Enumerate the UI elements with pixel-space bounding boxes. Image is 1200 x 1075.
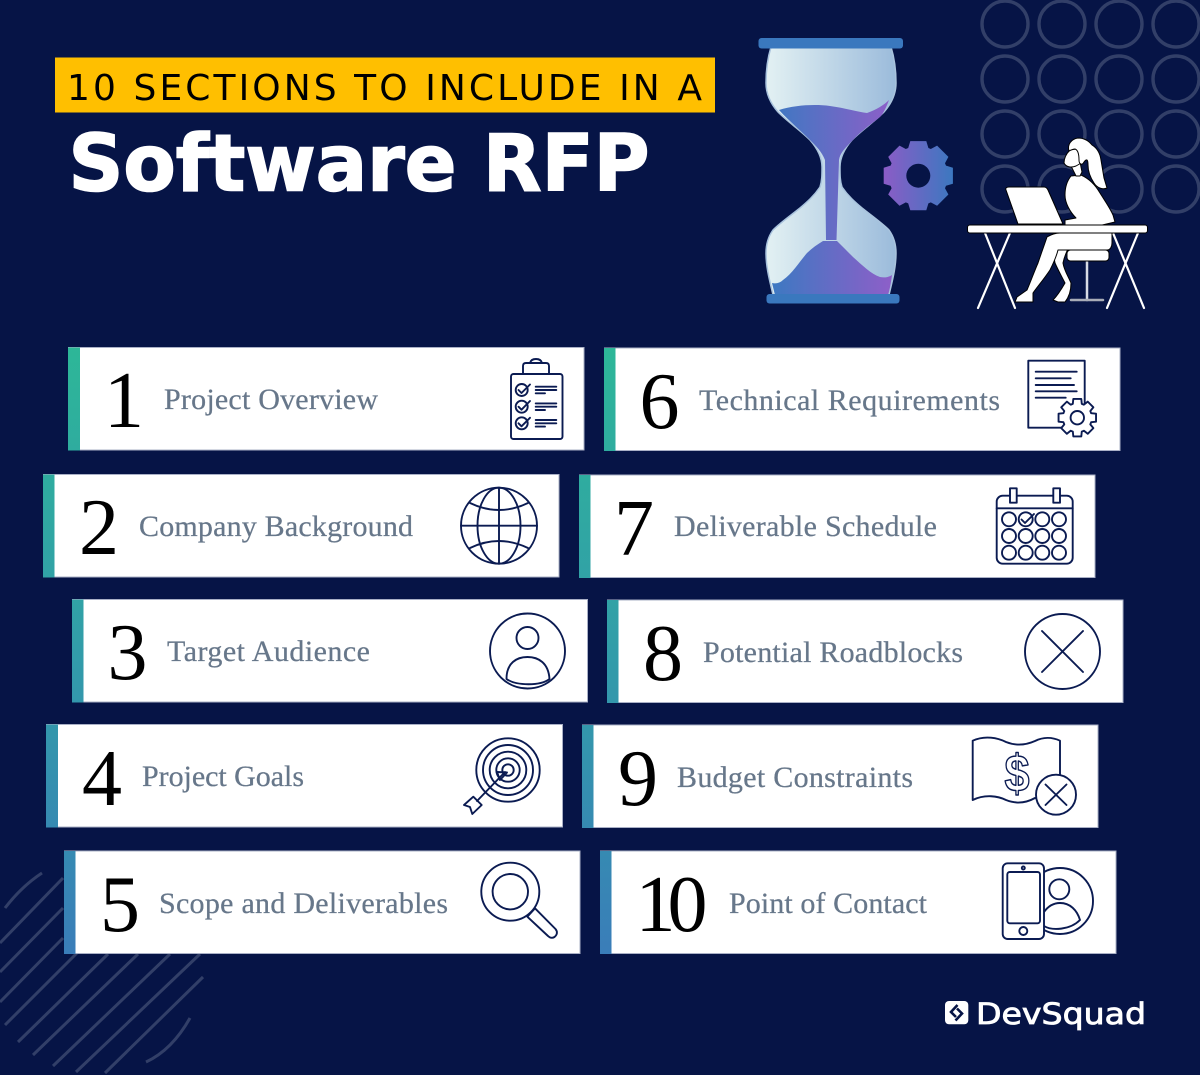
icon: magnifying glass — [481, 863, 557, 938]
icon: document with gear — [1028, 361, 1096, 436]
icon: banknote with X — [973, 738, 1076, 815]
icon: globe — [461, 488, 537, 564]
label: Project Goals — [142, 760, 304, 793]
number 6: 6 — [640, 358, 680, 446]
hair — [1068, 138, 1107, 189]
number 7: 7 — [614, 485, 654, 573]
icon: logo mark — [945, 1001, 968, 1024]
icon: banknote with X: $ — [1004, 745, 1030, 803]
icon: X in circle — [1025, 614, 1100, 689]
label: Technical Requirements — [699, 384, 1000, 417]
number 10: 10 — [636, 861, 708, 949]
label: Deliverable Schedule — [674, 510, 937, 543]
laptop — [1006, 187, 1063, 224]
icon: clipboard checklist — [511, 359, 562, 439]
number 9: 9 — [618, 735, 658, 823]
hourglass illustration — [758, 38, 903, 304]
label: Budget Constraints — [677, 761, 913, 794]
card 3: Target Audience — [72, 600, 588, 702]
card 6: Technical Requirements — [604, 348, 1120, 451]
card 4: Project Goals — [46, 724, 562, 828]
card 9: Budget Constraints — [582, 725, 1098, 828]
illustration: woman working at desk — [968, 138, 1148, 308]
back leg — [1053, 248, 1071, 302]
label: Potential Roadblocks — [703, 636, 963, 669]
number 4: 4 — [82, 735, 122, 823]
decorative circle pattern — [982, 1, 1199, 212]
icon: purple gear — [884, 141, 953, 210]
decorative diagonal hatch circle — [0, 873, 203, 1073]
label: Point of Contact — [729, 887, 928, 920]
desk legs — [978, 233, 1144, 308]
torso and arm — [1065, 175, 1115, 226]
card 5: Scope and Deliverables — [64, 851, 580, 954]
front leg and hips — [1015, 233, 1112, 302]
title: Software RFP — [68, 120, 650, 210]
card 10: Point of Contact — [600, 851, 1116, 954]
neck and face — [1071, 162, 1082, 176]
label: Project Overview — [164, 383, 378, 416]
label: Company Background — [139, 510, 413, 543]
card 2: Company Background — [43, 474, 559, 578]
stool — [1067, 250, 1109, 300]
number 3: 3 — [108, 609, 148, 697]
card 7: Deliverable Schedule — [579, 475, 1095, 578]
card 1: Project Overview — [68, 348, 584, 450]
icon: target with arrow — [464, 738, 540, 814]
desk top — [968, 225, 1148, 233]
card 8: Potential Roadblocks — [607, 600, 1123, 703]
number 1: 1 — [104, 357, 144, 445]
logo: DevSquad: DevSquad — [976, 997, 1146, 1031]
number 5: 5 — [100, 861, 140, 949]
label: Scope and Deliverables — [159, 887, 448, 920]
number 8: 8 — [643, 610, 683, 698]
label: Target Audience — [167, 635, 370, 668]
icon: calendar — [997, 488, 1073, 564]
title banner: 10 SECTIONS TO INCLUDE IN A — [67, 68, 702, 109]
icon: person in circle — [490, 614, 565, 688]
number 2: 2 — [79, 484, 119, 572]
icon: phone and contact — [1003, 863, 1093, 939]
